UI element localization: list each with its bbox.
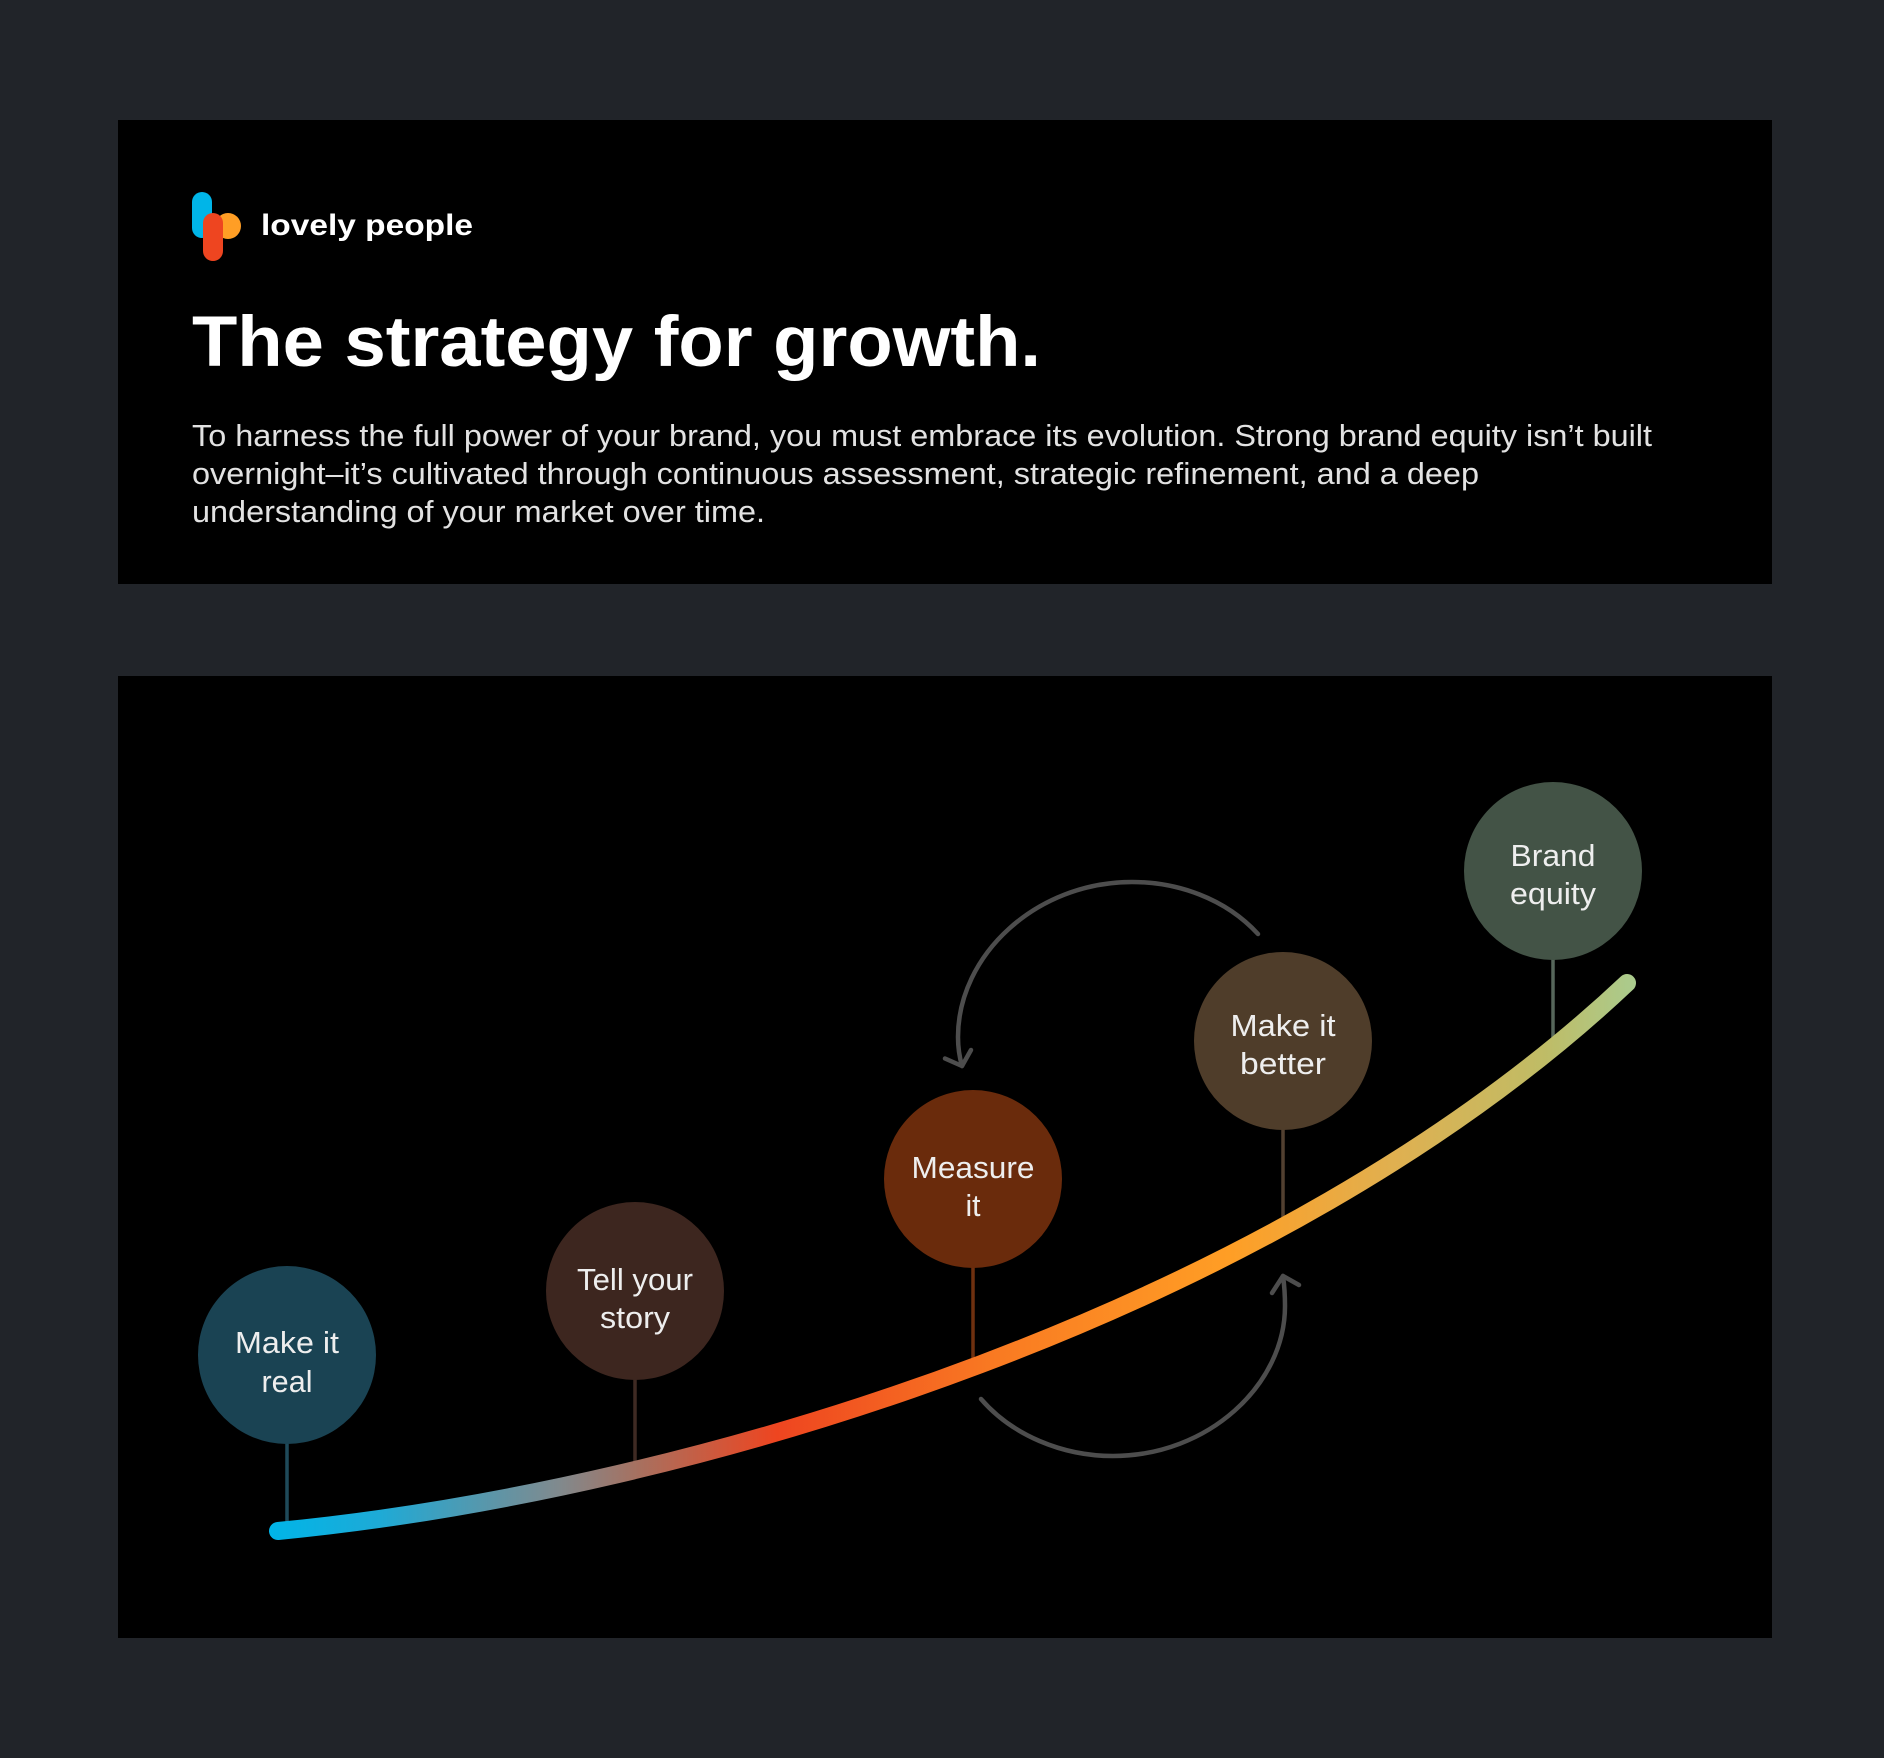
node: measure it: Measure [912,1150,1034,1185]
logo wordmark: lovely people [261,209,473,242]
intro text: To harness the full power of your brand, you must embrace its evolution. Strong brand equity isn’t built [192,418,1652,453]
node: make it better: Make it [1230,1008,1336,1043]
node: make it real [198,1266,376,1444]
node: make it real: Make it [235,1325,339,1360]
intro text [192,418,1652,529]
connector: make it real [285,1440,289,1526]
node: brand equity: equity [1510,876,1597,911]
node: make it real: real [262,1364,312,1399]
logo: lovely people [192,192,473,261]
connector: brand equity [1551,958,1555,1045]
node: make it better: better [1240,1046,1326,1081]
node: tell your story [546,1202,724,1380]
node: tell your story: story [600,1300,671,1335]
connector: tell your story [633,1378,637,1466]
arrow: top loop back to measure it [945,882,1258,1066]
title: The strategy for growth. [192,303,1041,382]
node: measure it: it [966,1188,981,1223]
arrow: bottom loop up to make it better [981,1276,1299,1456]
panel: header [118,120,1772,584]
panel: growth chart [118,676,1772,1638]
node: make it better [1194,952,1372,1130]
connector: measure it [971,1265,975,1360]
icon: logo mark [192,192,241,261]
intro text: understanding of your market over time. [192,494,765,529]
growth curve [278,983,1627,1531]
connector: make it better [1281,1128,1285,1222]
node: brand equity: Brand [1510,838,1596,873]
node: measure it [884,1090,1062,1268]
intro text: overnight–it’s cultivated through continuous assessment, strategic refinement, and a deep [192,456,1479,491]
node: brand equity [1464,782,1642,960]
node: tell your story: Tell your [577,1262,693,1297]
